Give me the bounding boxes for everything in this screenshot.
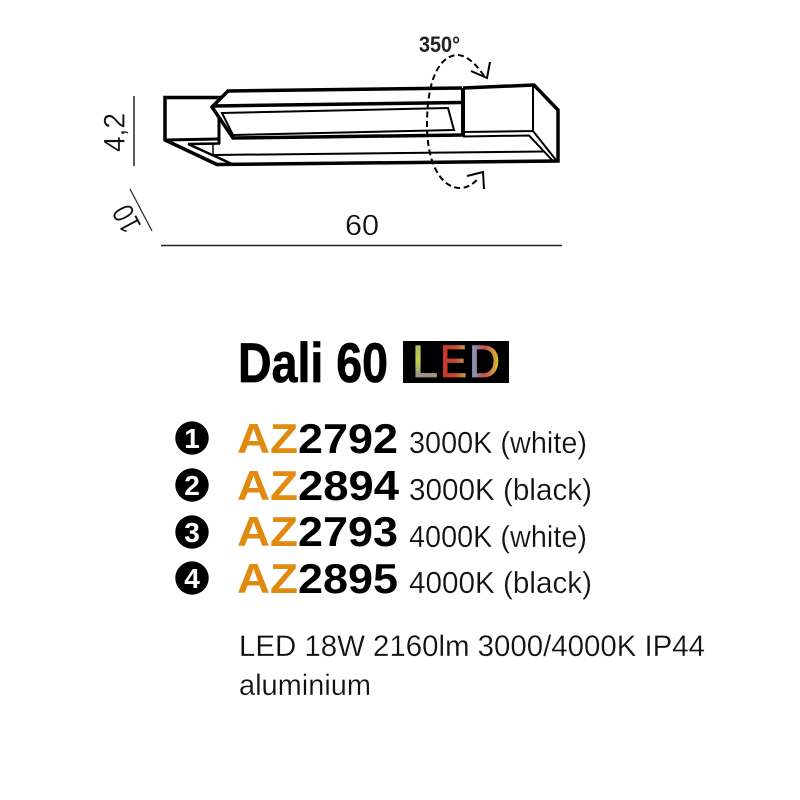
product row 1: 2792 xyxy=(298,415,398,462)
left end box xyxy=(165,98,232,165)
dimension: height: 4,2 xyxy=(98,113,132,152)
rotating panel xyxy=(212,88,463,138)
product row 4: 4 xyxy=(184,563,200,594)
dimension: depth: 10 xyxy=(106,199,148,238)
LED badge xyxy=(403,336,509,387)
specification text: aluminium xyxy=(239,669,371,702)
LED badge: E xyxy=(440,336,467,387)
dimension: height xyxy=(98,96,134,166)
product row 1: 3000K (white) xyxy=(409,426,587,460)
dimension: width: 60 xyxy=(345,210,379,242)
product row 2: 2894 xyxy=(298,462,400,509)
product row 1 xyxy=(175,415,587,462)
product row 1: 1 xyxy=(184,423,200,454)
product row 4: 2895 xyxy=(298,555,398,602)
product row 3 xyxy=(175,508,587,555)
technical drawing: lamp xyxy=(165,55,558,189)
product row 2 xyxy=(175,462,592,509)
product row 3: 4000K (white) xyxy=(409,520,587,554)
product row 2: 3000K (black) xyxy=(409,473,592,507)
product row 3: AZ xyxy=(237,508,298,555)
product row 4 xyxy=(175,555,592,602)
rotation label: 350° xyxy=(419,32,460,57)
product row 3: 2793 xyxy=(298,508,398,555)
product row 2: AZ xyxy=(237,462,298,509)
LED badge: L xyxy=(412,336,438,387)
product row 3: 3 xyxy=(184,517,200,548)
back rail and lower edge xyxy=(213,85,558,164)
LED badge: D xyxy=(469,336,500,387)
product row 2: 2 xyxy=(184,470,200,501)
rotation arrow: dashed arc xyxy=(427,55,490,189)
product row 4: AZ xyxy=(237,555,298,602)
specification text: LED 18W 2160lm 3000/4000K IP44 xyxy=(239,630,705,663)
product row 4: 4000K (black) xyxy=(409,566,592,600)
product row 1: AZ xyxy=(237,415,298,462)
title: Dali 60 xyxy=(238,331,388,394)
specification text xyxy=(239,630,705,702)
